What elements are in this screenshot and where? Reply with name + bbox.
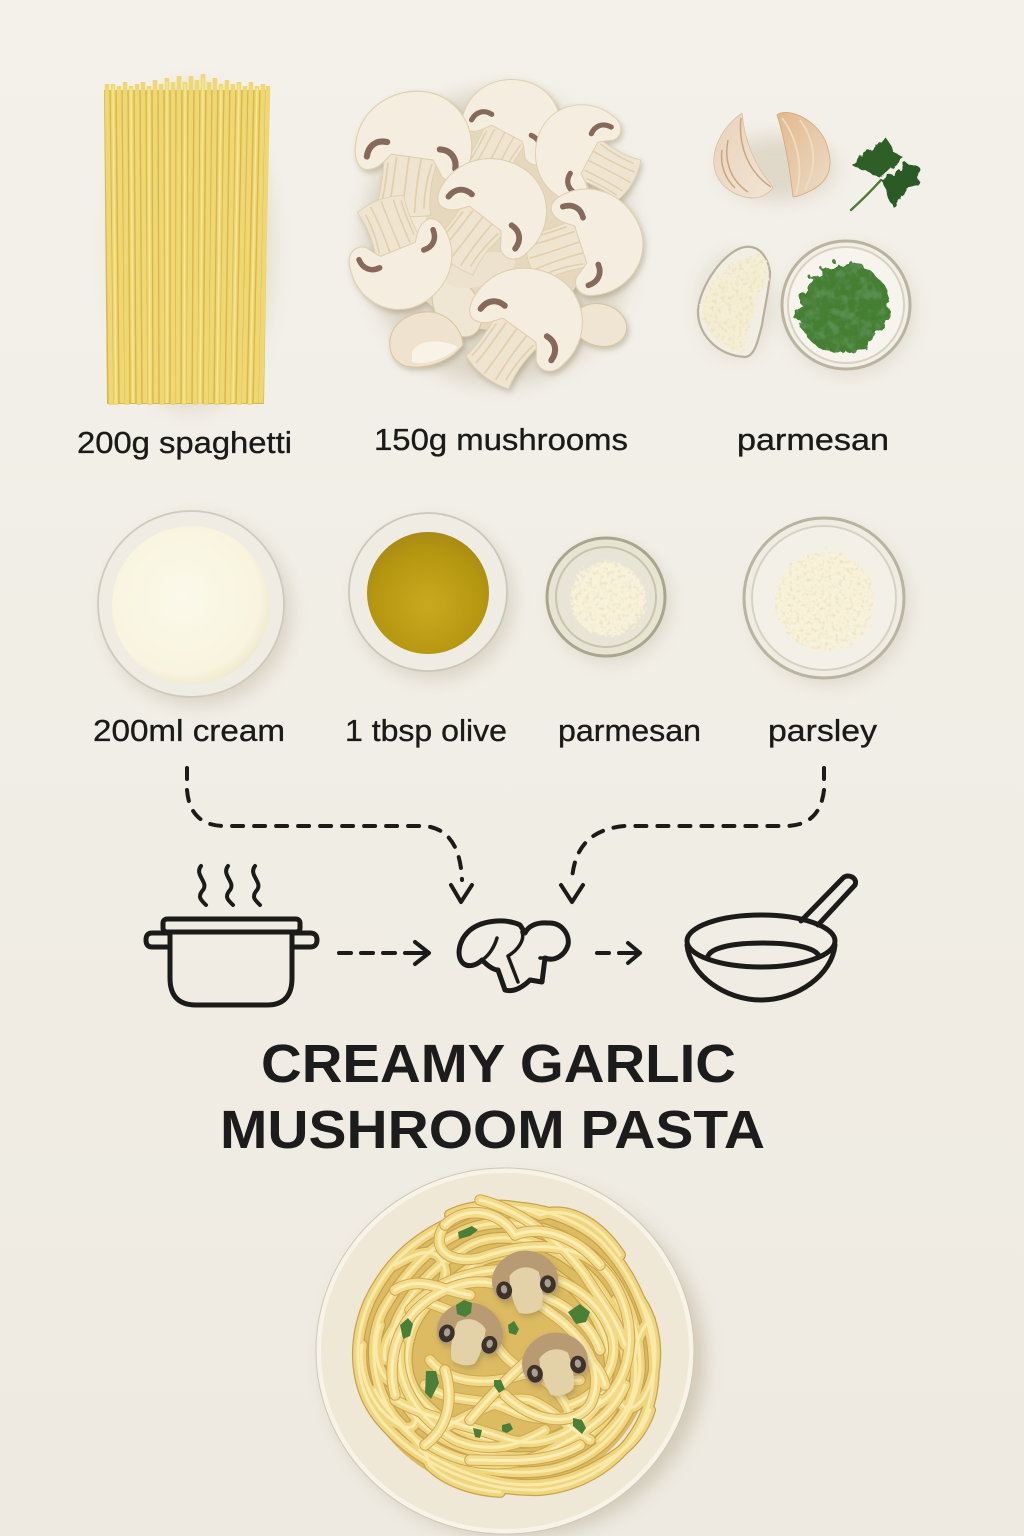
panel: olive oil bowl — [349, 513, 513, 679]
arrow: dashed from parsley to mushrooms — [561, 768, 824, 902]
panel: cream bowl — [98, 511, 291, 705]
icon: mixing bowl with spoon handle — [687, 876, 856, 1000]
label: 200ml cream: 200ml cream — [93, 713, 285, 748]
icon: mushroom — [459, 921, 568, 991]
parsley flecks — [400, 1226, 590, 1438]
half glass with grated parmesan — [698, 247, 772, 357]
garlic cloves — [714, 112, 836, 201]
panel: small parmesan glass bowl — [547, 538, 669, 661]
title: MUSHROOM PASTA — [220, 1100, 765, 1160]
icon: steaming pot — [146, 866, 317, 1005]
label: parmesan (middle): parmesan — [558, 713, 701, 748]
mushroom slices on pasta — [429, 1246, 594, 1402]
panel: sliced mushrooms — [330, 61, 656, 410]
parsley sprig — [851, 136, 920, 210]
arrow: mushroom to bowl — [597, 943, 640, 963]
arrow: dashed from cream to mushrooms — [187, 768, 472, 902]
panel: finished pasta bowl — [316, 1168, 705, 1536]
panel: large parmesan glass bowl — [744, 518, 908, 683]
label: 150g mushrooms: 150g mushrooms — [374, 422, 628, 457]
title — [220, 1034, 765, 1160]
arrow: pot to mushroom — [339, 942, 429, 964]
glass bowl with chopped parsley — [782, 241, 913, 374]
mushroom pieces beneath — [374, 120, 632, 367]
label: 1 tbsp olive: 1 tbsp olive — [345, 713, 507, 748]
label: parsley: parsley — [768, 713, 878, 748]
panel: garlic, parsley sprig and garnish bowls — [698, 112, 920, 374]
label: 200g spaghetti: 200g spaghetti — [77, 425, 292, 460]
panel: spaghetti bundle — [104, 74, 274, 413]
label: parmesan (top): parmesan — [737, 422, 889, 457]
title: CREAMY GARLIC — [261, 1034, 736, 1094]
noodles — [357, 1200, 655, 1492]
